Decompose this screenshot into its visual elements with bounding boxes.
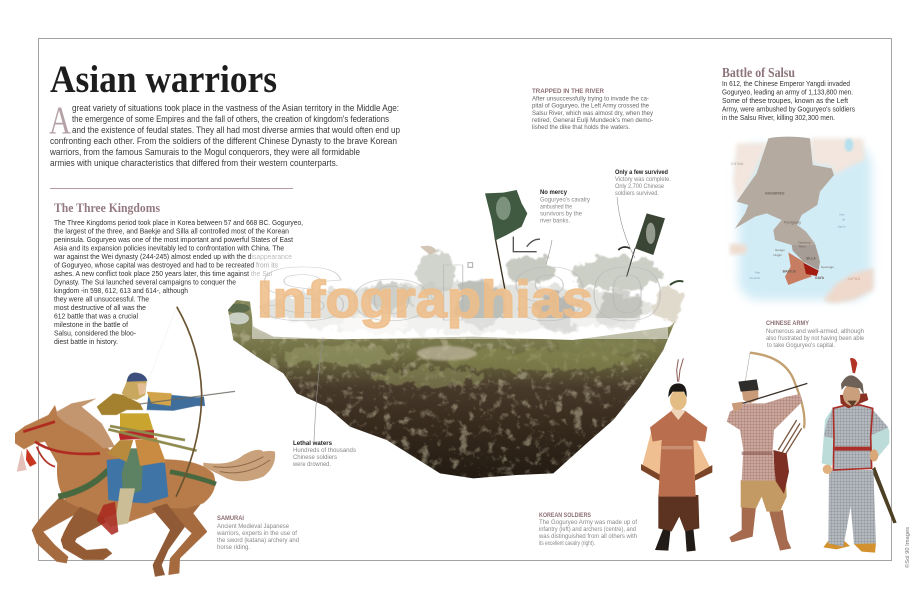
caption: trapped in the river — [532, 88, 654, 131]
island body — [228, 300, 675, 478]
caption: chinese army — [766, 320, 865, 349]
horse mane — [57, 398, 115, 448]
map Silla — [792, 245, 820, 270]
intro text block: confronting each other. From the soldiers of the different Chinese Dynasty to the brave Korean — [50, 136, 397, 146]
caption: chinese army: Numerous and well-armed, although — [766, 328, 865, 335]
intro text block: great variety of situations took place in the vastness of the Asian territory in the Middle Age: — [72, 103, 399, 113]
map sea background — [738, 145, 872, 300]
text block: The Three Kingdoms: most destructive of all was the — [54, 303, 146, 312]
heading: The Three Kingdoms: The Three Kingdoms — [54, 201, 160, 215]
text block: The Three Kingdoms: peninsula. Goguryeo was one of the most important and powerful States of East — [54, 235, 293, 244]
intro text block: warriors, from the famous Samurais to the Mogul conquerors, they were all formidable — [49, 147, 360, 157]
map labels: River — [799, 245, 806, 249]
text block: The Three Kingdoms: ashes. A new conflict took place 250 years later, this time against the Sui — [54, 269, 272, 278]
text block: The Three Kingdoms: The Three Kingdoms period took place in Korea between 57 and 668 BC. Goguryeo, — [54, 218, 303, 227]
map Gaya — [803, 263, 819, 276]
bow and arrow — [176, 307, 202, 497]
map labels: Pyongyang — [784, 220, 801, 224]
text block: The Three Kingdoms: war against the Wei dynasty (244-245) almost ended up with the disappearance — [53, 252, 292, 261]
map labels: GOGURYEO — [765, 192, 785, 196]
map labels: Japón — [837, 224, 846, 228]
caption: no mercy: No mercy — [540, 189, 568, 196]
text block: The Three Kingdoms: Asia and its expansion policies inevitably led to confrontation with China. The — [54, 244, 284, 252]
watermark: Sol 90 — [256, 252, 666, 337]
caption: only a few survived: Only a few survived — [615, 169, 668, 176]
battle details — [420, 237, 683, 285]
map neighbouring land — [733, 143, 768, 202]
caption: samurai — [216, 515, 300, 551]
caption: chinese army: to take Goguryeo's capital. — [767, 342, 835, 349]
caption: samurai: horse riding. — [217, 544, 250, 551]
caption: samurai: warriors, experts in the use of — [216, 530, 297, 537]
map labels: Ungjin — [773, 253, 782, 257]
pointer line: only a few survived — [617, 197, 635, 258]
caption: only a few survived: Only 2,700 Chinese — [615, 183, 664, 190]
map: Korean peninsula — [730, 137, 873, 303]
samurai armour — [120, 413, 153, 432]
caption: samurai: SAMURAI — [217, 515, 244, 522]
caption: no mercy: river banks. — [540, 218, 570, 224]
illustration: Korean and Chinese soldiers — [641, 353, 897, 553]
intro text block: the emergence of some Empires and the fall of others, the creation of kingdom's federations — [72, 114, 389, 124]
drop cap: A — [49, 99, 71, 142]
caption: samurai: the sword (katana) archery and — [217, 537, 300, 544]
text block: The Three Kingdoms — [53, 218, 303, 346]
copyright: ©Sol 90 Images — [904, 527, 911, 568]
watermark: Infographias — [257, 271, 593, 329]
Korean archer soldier — [727, 353, 807, 551]
map labels: JAPAN — [847, 277, 861, 281]
caption: no mercy: ambushed the — [540, 204, 572, 210]
caption: korean soldiers: The Goguryeo Army was made up of — [539, 519, 637, 526]
caption: korean soldiers — [538, 512, 638, 547]
caption: lethal waters — [292, 440, 356, 468]
caption: lethal waters: were drowned. — [292, 461, 331, 468]
text block: Battle of Salsu: in the Salsu River, killing 302,300 men. — [722, 113, 835, 122]
samurai head — [122, 373, 147, 400]
caption: no mercy — [540, 189, 591, 224]
intro text block: and the existence of feudal states. They all had most diverse armies that would often end up — [72, 125, 400, 135]
map labels: SILLA — [806, 256, 816, 260]
samurai blue skirt — [107, 457, 168, 503]
soldiers and dust cloud — [260, 252, 683, 333]
map labels — [731, 162, 861, 281]
caption: only a few survived: soldiers survived. — [615, 190, 659, 197]
heading: Battle of Salsu: Battle of Salsu — [722, 65, 795, 80]
text block: The Three Kingdoms: diest battle in history. — [54, 337, 118, 346]
caption: only a few survived — [615, 169, 671, 197]
text block: The Three Kingdoms: the largest of the three, and Baekje and Silla all controlled most of the Korean — [54, 226, 289, 236]
watermark — [252, 252, 668, 339]
map labels: GAYA — [815, 276, 825, 280]
intro text block: armies with unique characteristics that differed from their western counterparts. — [50, 158, 338, 168]
text block: The Three Kingdoms: Salsu, considered the bloo- — [54, 328, 137, 338]
caption: korean soldiers: KOREAN SOLDIERS — [539, 512, 591, 519]
caption: no mercy: Goguryeo's cavalry — [540, 196, 591, 204]
text block: Battle of Salsu: In 612, the Chinese Emperor Yangdi invaded — [722, 79, 850, 88]
caption: trapped in the river: retired. General Eulji Mundeok's men demo- — [532, 117, 653, 124]
caption: trapped in the river: pital of Goguryeo, the Left Army crossed the — [532, 102, 650, 110]
samurai leg — [103, 488, 135, 527]
caption: lethal waters: Lethal waters — [293, 440, 333, 447]
caption: lethal waters: Hundreds of thousands — [293, 447, 356, 454]
text block: Battle of Salsu: Goguryeo, leading an army of 1,133,800 men. — [722, 88, 853, 96]
text block: The Three Kingdoms: kingdom -in 598, 612, 613 and 614-, although — [54, 286, 188, 295]
intro text block — [49, 99, 400, 168]
map labels: Amarillo — [749, 276, 760, 280]
caption: trapped in the river: After unsuccessfully trying to invade the ca- — [532, 96, 649, 102]
caption: chinese army: also frustrated by not having been able — [766, 335, 865, 342]
map Goguryeo territory — [735, 137, 834, 258]
title: Asian warriors — [50, 58, 277, 101]
horse far legs — [32, 497, 207, 575]
Chinese armoured soldier — [822, 358, 897, 553]
horse near legs — [61, 503, 185, 577]
caption: korean soldiers: its excellent cavalry (right). — [539, 540, 595, 547]
floating island battle scene — [227, 190, 683, 480]
flag: dark banner — [627, 213, 665, 277]
text block: The Three Kingdoms: Dynasty. The Sui launched several campaigns to conquer the — [54, 278, 236, 286]
caption: chinese army: CHINESE ARMY — [766, 320, 810, 327]
map labels: Gyeongju — [821, 265, 834, 269]
text block: Battle of Salsu: Some of these troupes, known as the Left — [722, 96, 848, 105]
caption: lethal waters: Chinese soldiers — [293, 454, 337, 461]
text block: Battle of Salsu: Army, were ambushed by Goguryeo's soldiers — [722, 104, 855, 114]
map labels: Mar — [839, 213, 844, 217]
flag: green banner — [485, 190, 527, 290]
map Baekje — [785, 252, 812, 285]
island texture — [227, 297, 677, 480]
map labels: de — [842, 218, 846, 222]
Korean infantry soldier — [641, 358, 712, 552]
illustration: samurai on horseback — [15, 307, 275, 577]
text block: The Three Kingdoms: 612 battle that was a crucial — [54, 312, 138, 320]
horse tail — [203, 450, 275, 481]
text block: The Three Kingdoms: they were all unsuccessful. The — [54, 294, 149, 304]
caption: trapped in the river: TRAPPED IN THE RIVER — [532, 88, 605, 95]
caption: samurai: Ancient Medieval Japanese — [217, 523, 290, 530]
map labels: Gongju — [775, 248, 785, 252]
map labels: BAEKJE — [783, 270, 797, 274]
caption: trapped in the river: Salsu River, which was almost dry, when they — [532, 110, 654, 117]
caption: korean soldiers: infantry (left) and archers (centre), and — [539, 526, 637, 533]
sword scabbards — [108, 426, 197, 451]
horse body — [15, 405, 215, 523]
caption: korean soldiers: was distinguished from all others with — [538, 533, 638, 540]
caption: no mercy: survivors by the — [540, 210, 583, 218]
text block: Battle of Salsu — [722, 79, 855, 122]
pointer line: lethal waters — [314, 337, 323, 441]
horse tack — [23, 422, 216, 497]
text block: The Three Kingdoms: milestone in the battle of — [54, 320, 129, 329]
map labels: CHINA — [731, 162, 744, 166]
map labels: Mar — [755, 271, 760, 275]
caption: trapped in the river: lished the dike that holds the waters. — [532, 124, 630, 131]
pointer line: no mercy — [546, 240, 552, 264]
samurai arms — [147, 395, 205, 411]
text block: The Three Kingdoms: of Goguryeo, whose capital was destroyed and had to be recreated from its — [54, 260, 278, 270]
caption: only a few survived: Victory was complete. — [615, 176, 671, 183]
map labels: Daedong — [798, 240, 811, 244]
